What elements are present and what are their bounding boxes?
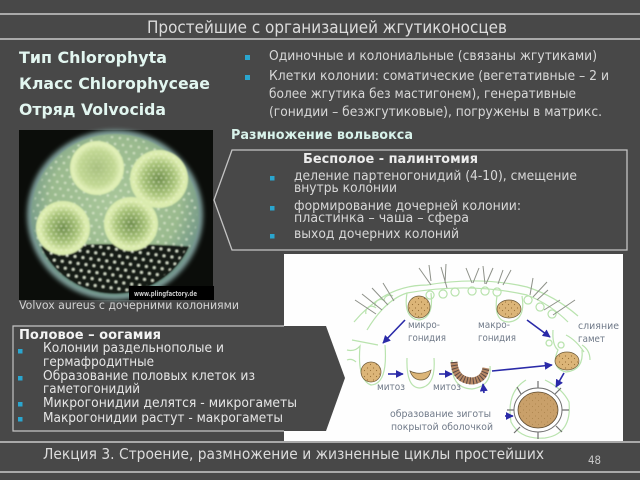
- diagram labels: гамет: [578, 334, 605, 345]
- panel: sexual reproduction: Макрогонидии растут - макрогаметы: [43, 410, 283, 426]
- microgonidium cell: [408, 296, 430, 318]
- taxonomy heading: [19, 48, 210, 119]
- panel: sexual reproduction: гаметогонидий: [43, 381, 140, 397]
- description bullets: [245, 48, 609, 120]
- photo credit: [129, 286, 214, 300]
- panel: asexual reproduction: Бесполое - палинтомия: [303, 152, 478, 167]
- panel: sexual reproduction: [13, 326, 345, 431]
- diagram labels: покрытой оболочкой: [391, 422, 493, 433]
- photo caption: Volvox aureus с дочерними колониями: [19, 298, 239, 312]
- flagella: [355, 264, 575, 315]
- description bullets: более жгутика без мастигонем), генеративные: [269, 86, 576, 102]
- panel: sexual reproduction: гермафродитные: [43, 354, 154, 370]
- diagram labels: слияние: [578, 321, 619, 332]
- diagram labels: гонидия: [408, 333, 446, 344]
- panel: sexual reproduction: Колонии раздельнополые и: [43, 340, 224, 356]
- description bullets: Одиночные и колониальные (связаны жгутиками): [269, 48, 597, 64]
- arrows: [383, 320, 564, 416]
- fertilised cell: [555, 352, 579, 370]
- colony wall: [347, 281, 590, 438]
- diagram labels: митоз: [377, 382, 405, 393]
- header rules: [0, 13, 640, 40]
- taxonomy heading: Класс Chlorophyceae: [19, 74, 210, 93]
- photo credit: www.plingfactory.de: [134, 290, 197, 298]
- panel: asexual reproduction: пластинка – чаша – сфера: [294, 210, 469, 226]
- diagram labels: образование зиготы: [390, 409, 491, 420]
- panel: sexual reproduction: Образование половых клеток из: [43, 368, 255, 384]
- reproduction heading: Размножение вольвокса: [231, 128, 413, 143]
- footer: lecture title: Лекция 3. Строение, размножение и жизненные циклы простейших: [43, 445, 544, 463]
- photo: Volvox aureus colony: [19, 130, 214, 300]
- diagram labels: гонидия: [478, 333, 516, 344]
- page number: 48: [588, 453, 601, 467]
- panel: asexual reproduction: внутрь колонии: [294, 180, 397, 196]
- taxonomy heading: Тип Chlorophyta: [19, 48, 167, 67]
- mitosis cells: [361, 362, 486, 382]
- zygote with spiny wall: [507, 381, 569, 439]
- panel: asexual reproduction: деление партеногонидий (4-10), смещение: [294, 168, 577, 184]
- macrogonidium cell: [497, 300, 521, 318]
- panel: asexual reproduction: формирование дочерней колонии:: [294, 198, 521, 214]
- description bullets: (гонидии – безжгутиковые), погружены в матрикс.: [269, 104, 602, 120]
- panel: asexual reproduction: выход дочерних колоний: [294, 226, 459, 242]
- title: Простейшие с организацией жгутиконосцев: [147, 18, 507, 38]
- description bullets: Клетки колонии: соматические (вегетативные – 2 и: [269, 68, 609, 84]
- diagram labels: микро-: [408, 320, 440, 331]
- diagram labels: [377, 320, 619, 433]
- panel: sexual reproduction: Половое – оогамия: [19, 328, 161, 343]
- panel: asexual reproduction: [214, 150, 627, 250]
- diagram labels: митоз: [433, 382, 461, 393]
- diagram labels: макро-: [478, 320, 510, 331]
- taxonomy heading: Отряд Volvocida: [19, 100, 166, 119]
- panel: sexual reproduction: Микрогонидии делятся - микрогаметы: [43, 395, 297, 411]
- footer rules: [0, 441, 640, 473]
- panel: life cycle diagram: [284, 254, 623, 441]
